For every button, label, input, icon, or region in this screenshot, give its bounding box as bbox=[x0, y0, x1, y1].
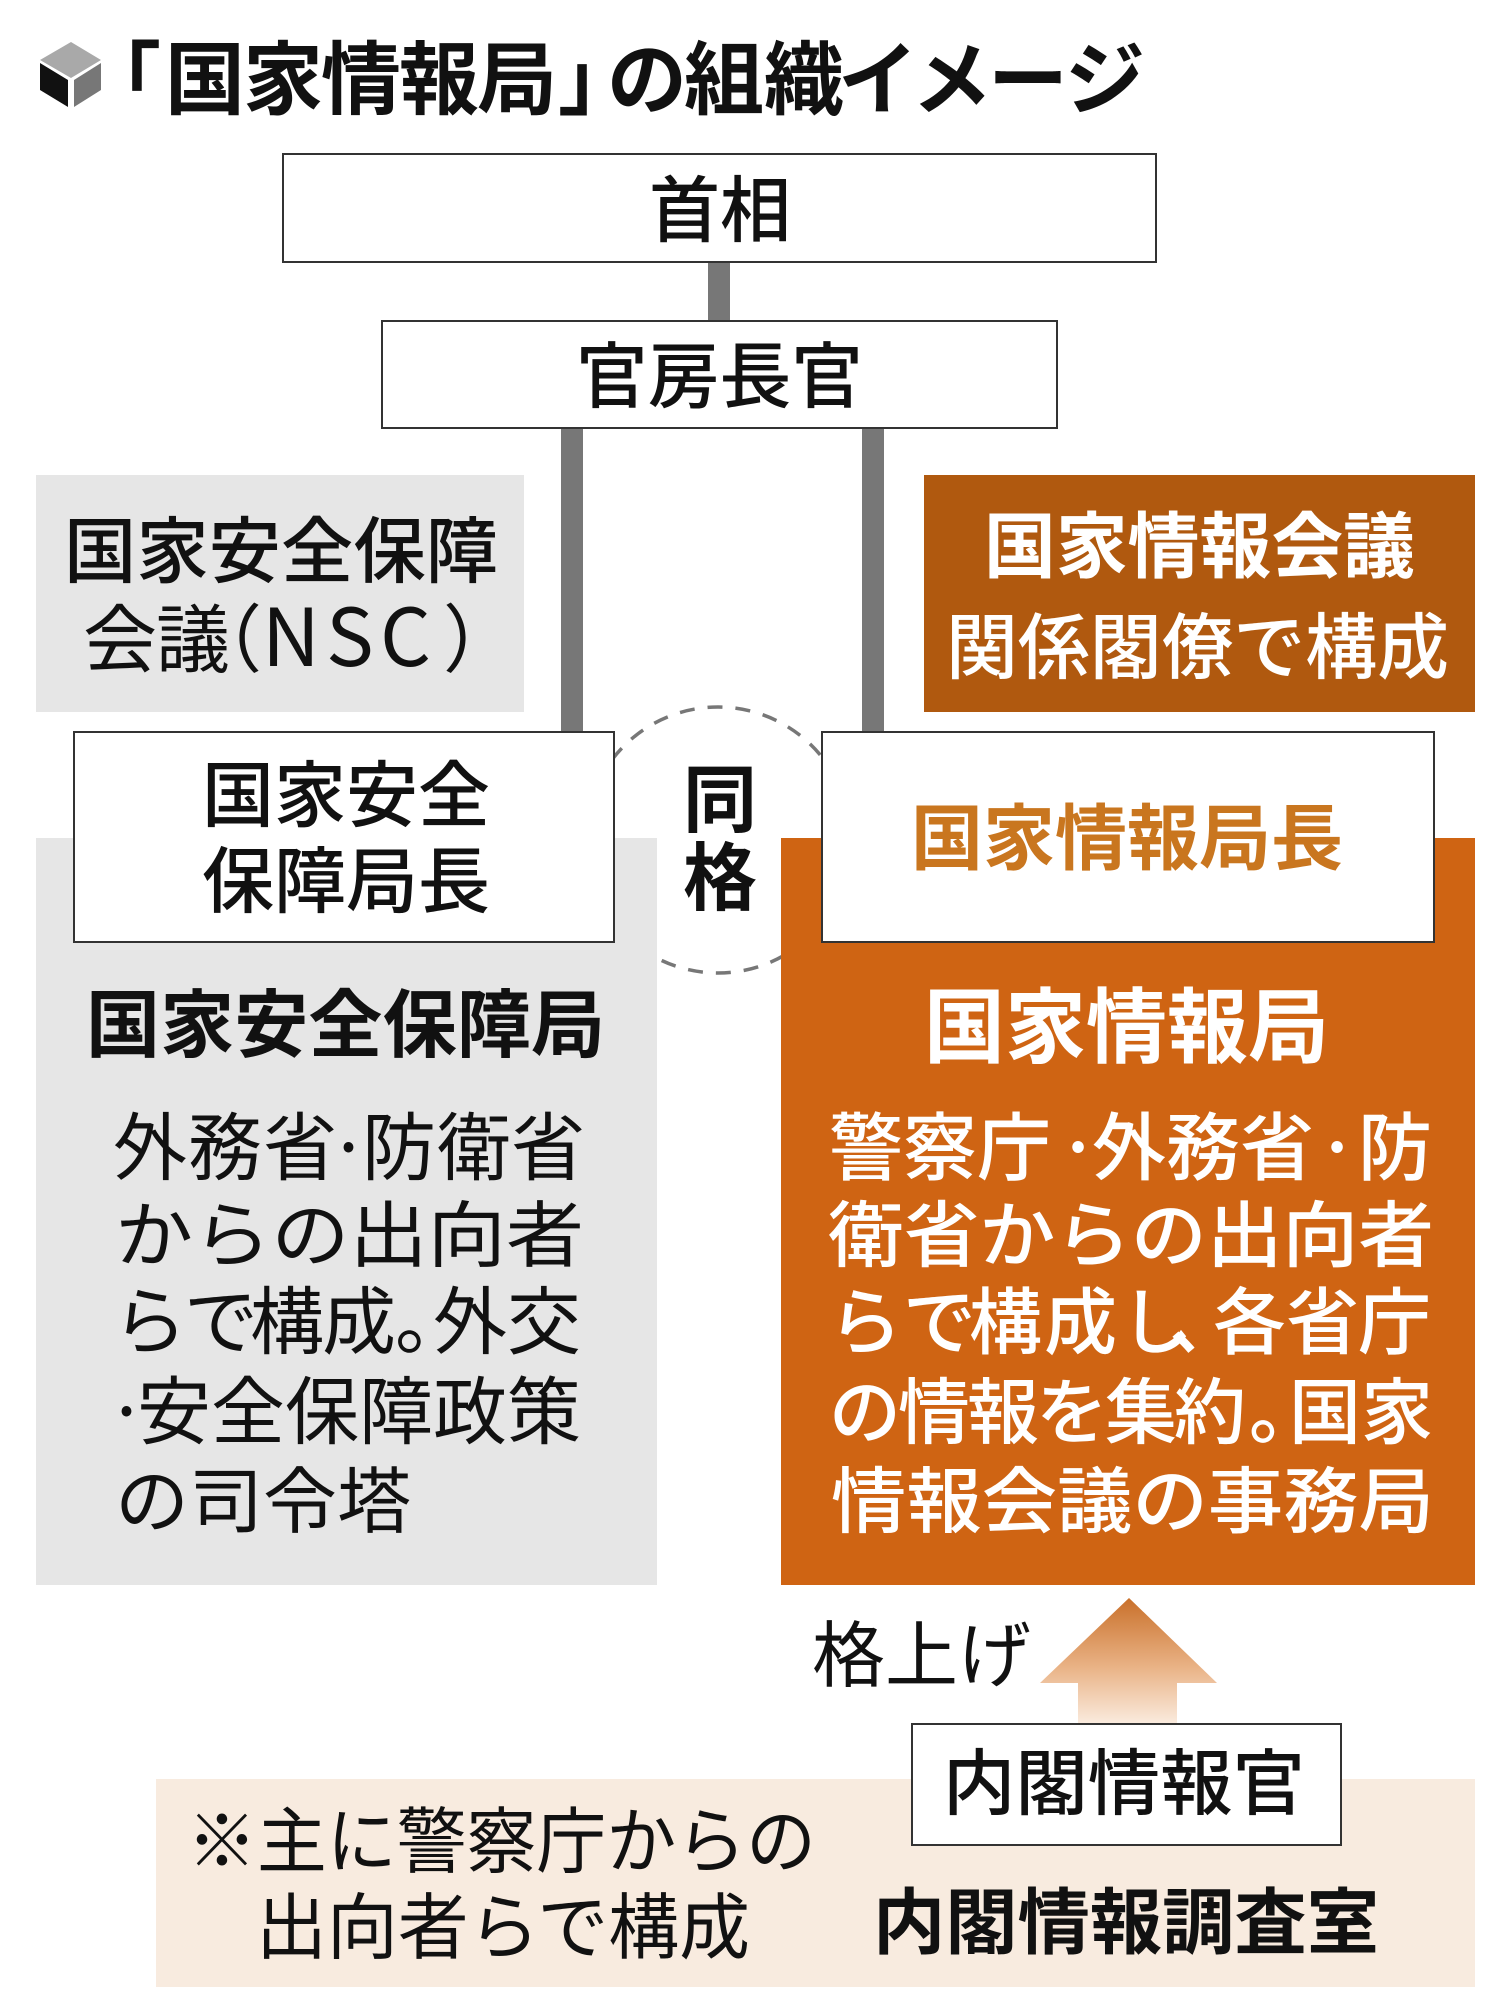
label: upgrade: 格上げ bbox=[812, 1597, 1031, 1702]
panel: national security council: NSC bbox=[262, 574, 431, 690]
panel: cabinet intelligence research office bbox=[156, 1779, 1475, 1987]
box: chief cabinet secretary: 官房長官 bbox=[576, 318, 863, 423]
text: national security secretariat description: らで構成。外交 bbox=[113, 1263, 581, 1370]
panel: national intelligence council: 関係閣僚で構成 bbox=[946, 589, 1449, 694]
connector: to national security secretariat head bbox=[561, 428, 583, 733]
text: national security secretariat description bbox=[106, 1089, 585, 1548]
text: national security secretariat description: からの出向者 bbox=[115, 1177, 584, 1282]
heading: cabinet intelligence research office: 内閣情報調査室 bbox=[873, 1864, 1379, 1969]
panel: national intelligence council bbox=[924, 475, 1475, 712]
panel: national intelligence bureau bbox=[781, 838, 1475, 1585]
text: national intelligence bureau description: の情報を集約。国家 bbox=[829, 1354, 1433, 1459]
panel: national security council: ） bbox=[443, 581, 517, 688]
heading: national intelligence bureau: 国家情報局 bbox=[924, 961, 1329, 1080]
connector: prime minister to chief cabinet secretary bbox=[708, 262, 730, 320]
panel: national security council: 国家安全保障 bbox=[64, 493, 498, 598]
panel: national intelligence council: 国家情報会議 bbox=[984, 488, 1415, 593]
dashed circle: equal rank bbox=[585, 707, 851, 973]
text: national intelligence bureau description: 警察庁·外務省·防 bbox=[829, 1089, 1432, 1196]
title: 「国家情報局」の組織イメージ bbox=[81, 16, 1145, 132]
box: prime minister: 首相 bbox=[649, 152, 791, 257]
box: cabinet intelligence officer: 内閣情報官 bbox=[943, 1725, 1305, 1830]
box: head of national intelligence bureau: 国家情報局長 bbox=[911, 780, 1343, 885]
connector: to national intelligence bureau head bbox=[862, 428, 884, 733]
note: seconded staff bbox=[187, 1783, 816, 1974]
text: national security secretariat description: の司令塔 bbox=[115, 1443, 411, 1548]
arrow: upgrade bbox=[1040, 1598, 1217, 1723]
panel: national security council: 会議（ bbox=[83, 581, 262, 688]
box: chief cabinet secretary bbox=[382, 318, 1057, 428]
text: national intelligence bureau description: らで構成し、各省庁 bbox=[829, 1264, 1431, 1370]
box: head of national security secretariat: 国家安全 bbox=[202, 737, 490, 842]
heading: national security secretariat: 国家安全保障局 bbox=[86, 966, 605, 1073]
box: head of national security secretariat bbox=[74, 732, 614, 942]
icon: cube bbox=[40, 42, 101, 107]
box: head of national intelligence bureau bbox=[822, 732, 1434, 942]
box: prime minister bbox=[283, 152, 1156, 262]
label: equal rank bbox=[683, 741, 757, 926]
label: equal rank: 格 bbox=[683, 819, 757, 926]
note: seconded staff: ※主に警察庁からの bbox=[187, 1783, 816, 1888]
label: equal rank: 同 bbox=[683, 741, 757, 848]
text: national intelligence bureau description: 衛省からの出向者 bbox=[828, 1177, 1434, 1282]
text: national security secretariat description: 外務省·防衛省 bbox=[113, 1089, 585, 1196]
text: national intelligence bureau description: 情報会議の事務局 bbox=[831, 1443, 1434, 1548]
text: national intelligence bureau description bbox=[828, 1089, 1434, 1548]
panel: national security council bbox=[36, 475, 524, 712]
text: national security secretariat description: ·安全保障政策 bbox=[106, 1353, 581, 1460]
note: seconded staff: 出向者らで構成 bbox=[256, 1869, 750, 1974]
panel: national security secretariat bbox=[36, 838, 657, 1585]
box: head of national security secretariat: 保障局長 bbox=[202, 823, 490, 928]
